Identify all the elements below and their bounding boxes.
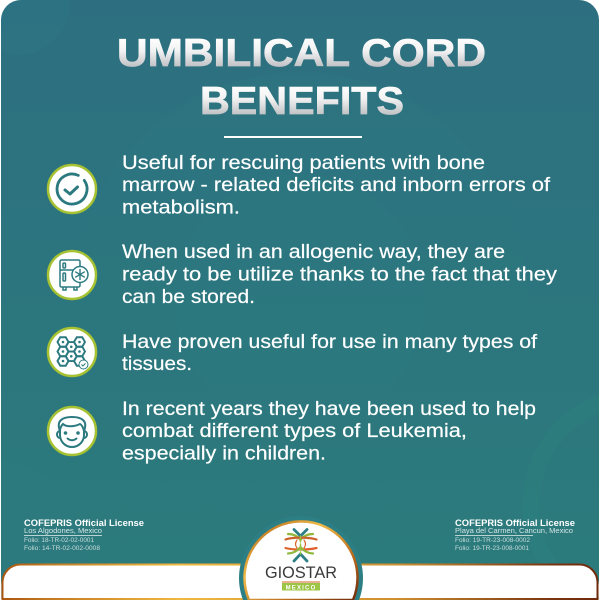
icon: refrigerator with snowflake <box>48 251 96 299</box>
benefit text 3: tissues. <box>122 353 192 375</box>
benefit text 1: marrow - related deficits and inborn errors of <box>122 174 551 196</box>
benefit text 4: In recent years they have been used to help <box>122 398 536 420</box>
license block: Los Algodones <box>24 518 144 552</box>
benefit text 2: can be stored. <box>122 286 255 308</box>
license block: Los Algodones: Folio: 14-TR-02-002-0008 <box>24 546 101 552</box>
benefit text 3 <box>122 331 538 375</box>
title: BENEFITS <box>200 80 404 123</box>
title: UMBILICAL CORD <box>117 32 486 75</box>
license block: Playa del Carmen: Folio: 19-TR-23-008-0002 <box>455 538 531 544</box>
logo tag: MEXICO <box>286 585 316 591</box>
license block: Playa del Carmen: Playa del Carmen, Cancun, Mexico <box>455 526 573 535</box>
logo mark: helix <box>286 530 316 561</box>
title <box>117 32 486 123</box>
license block: Playa del Carmen <box>455 518 575 552</box>
license block: Los Algodones: Los Algodones, Mexico <box>24 526 102 535</box>
title underline <box>224 136 362 138</box>
benefit text 1: Useful for rescuing patients with bone <box>122 152 485 174</box>
benefit text 4 <box>122 398 536 464</box>
benefit text 2: ready to be utilize thanks to the fact that they <box>122 264 557 286</box>
license block: Playa del Carmen: Folio: 19-TR-23-008-0001 <box>455 546 530 552</box>
icon: check mark badge <box>48 165 96 213</box>
license block: Los Algodones: Folio: 18-TR-02-02-0001 <box>24 538 95 544</box>
icon: child face <box>48 407 96 455</box>
benefit text 3: Have proven useful for use in many types of <box>122 331 538 353</box>
logo badge <box>239 516 363 600</box>
benefit text 1: metabolism. <box>122 196 240 218</box>
benefit text 1 <box>122 152 551 218</box>
footer white band <box>2 564 598 599</box>
logo wordmark: GIOSTAR <box>265 563 337 582</box>
benefit text 4: especially in children. <box>122 442 326 464</box>
benefit text 4: combat different types of Leukemia, <box>122 420 467 442</box>
benefit text 2: When used in an allogenic way, they are <box>122 241 505 263</box>
benefit text 2 <box>122 241 557 308</box>
license block: Los Algodones: COFEPRIS Official License <box>24 518 144 529</box>
license block: Playa del Carmen: COFEPRIS Official License <box>455 518 575 529</box>
icon: cell tissue hexagons <box>48 328 96 376</box>
